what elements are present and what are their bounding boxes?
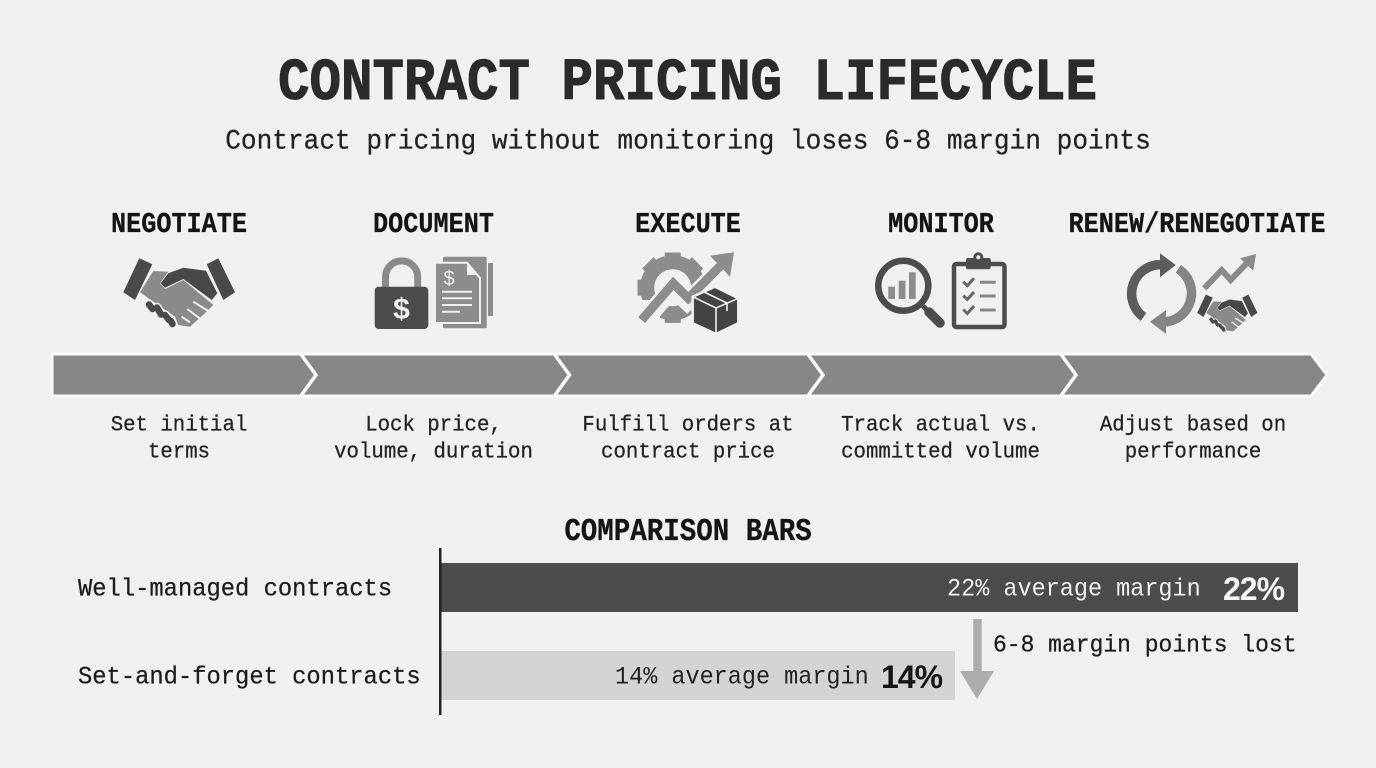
step description: monitor: committed volume [841, 440, 1040, 465]
step heading: execute: EXECUTE [635, 210, 741, 242]
step description: execute: contract price [601, 440, 775, 465]
title: CONTRACT PRICING LIFECYCLE [278, 49, 1097, 117]
step description: negotiate: Set initial [111, 413, 247, 438]
step heading: document: DOCUMENT [373, 210, 494, 242]
comparison heading: COMPARISON BARS [564, 513, 812, 550]
row label: well-managed: Well-managed contracts [78, 576, 392, 604]
arrow: margin loss [960, 619, 994, 699]
icon: padlock and contract documents: $ [393, 293, 410, 326]
bar: well-managed 22%: 22% [1223, 571, 1285, 607]
bar: well-managed 22%: 22% average margin [947, 576, 1201, 604]
icon: magnifier with chart and clipboard checklist [878, 254, 1004, 327]
bar: well-managed 22% [441, 563, 1298, 612]
step description: renew: Adjust based on [1100, 413, 1286, 438]
axis line [439, 548, 442, 715]
bar: set-and-forget 14%: 14% average margin [615, 664, 869, 692]
step description: monitor: Track actual vs. [841, 413, 1040, 438]
icon: handshake [123, 258, 235, 327]
bar: set-and-forget 14% [441, 651, 955, 700]
step heading: monitor: MONITOR [888, 210, 995, 242]
subtitle: Contract pricing without monitoring loses 6-8 margin points [225, 127, 1151, 158]
icon: renewal arrows, trend arrow and handshake [1132, 253, 1258, 334]
step heading: negotiate: NEGOTIATE [111, 210, 247, 242]
lifecycle chevron arrow [52, 353, 1327, 397]
callout: margin points lost: 6-8 margin points lost [993, 632, 1296, 660]
step description: document: Lock price, [365, 413, 502, 438]
step description: execute: Fulfill orders at [582, 413, 794, 438]
comparison bar chart [78, 548, 1298, 715]
row label: set-and-forget: Set-and-forget contracts [78, 664, 421, 692]
icon: gear, rising arrow and box [634, 252, 738, 334]
step heading: renew/renegotiate: RENEW/RENEGOTIATE [1068, 210, 1326, 242]
bar: set-and-forget 14%: 14% [881, 659, 943, 695]
step description: renew: performance [1125, 440, 1261, 465]
icon: padlock and contract documents [375, 257, 493, 329]
step description: negotiate: terms [148, 440, 210, 465]
icon: padlock and contract documents: $ [443, 268, 455, 290]
step description: document: volume, duration [334, 440, 533, 465]
